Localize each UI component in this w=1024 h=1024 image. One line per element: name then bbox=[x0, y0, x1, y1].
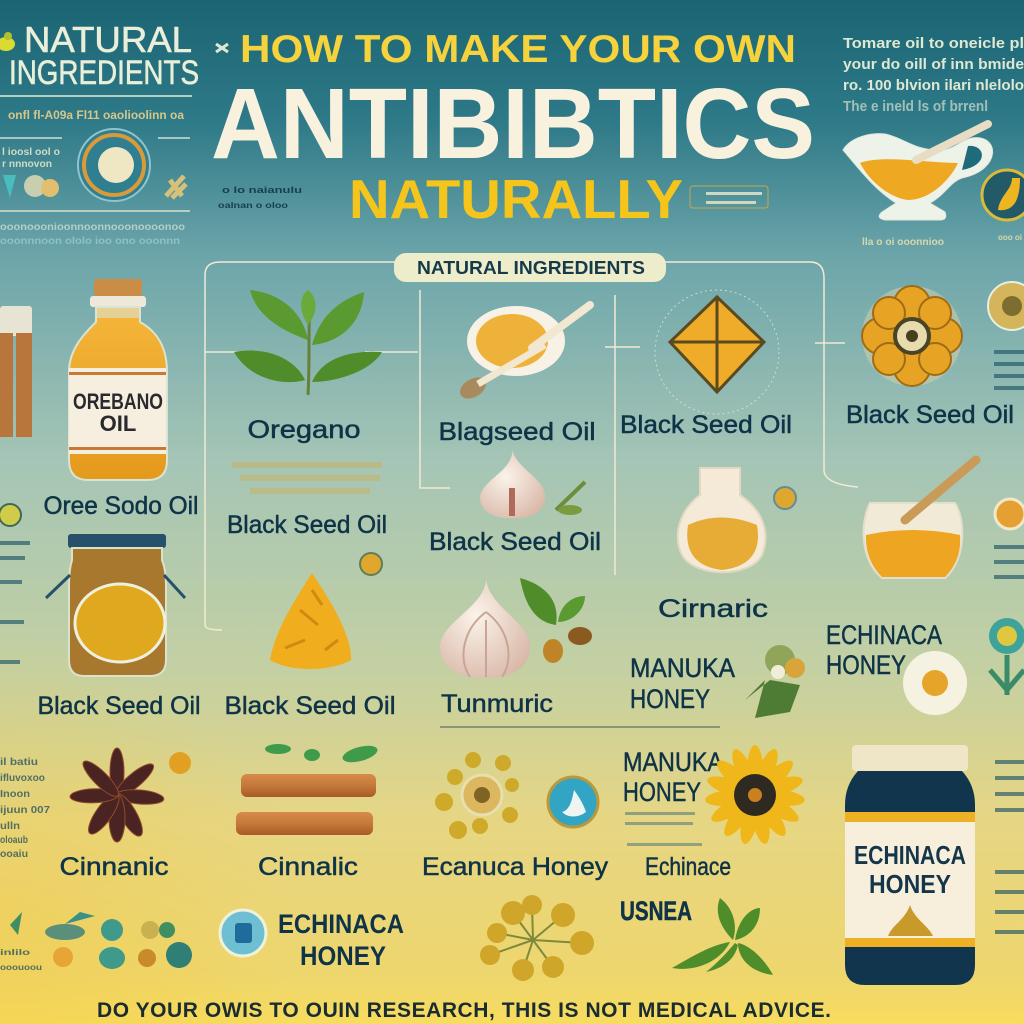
label: HONEY bbox=[300, 941, 386, 971]
icon: bowl and spoon bbox=[456, 305, 590, 403]
icons: bottom left herbs: ooouoou bbox=[0, 963, 42, 972]
text block: Tomare oil to oneicle pl bbox=[843, 35, 1024, 52]
icon: turmeric wedge bbox=[270, 573, 351, 669]
label: Echinace bbox=[645, 853, 731, 881]
label: MANUKA bbox=[623, 747, 723, 777]
heading: INGREDIENTS bbox=[9, 54, 199, 92]
small caption near title: oalnan o oloo bbox=[218, 201, 288, 210]
fine print: ooonnnoon ololo ioo ono ooonnn bbox=[0, 236, 180, 247]
icon: garlic small bbox=[480, 450, 585, 518]
icon: blue badge bbox=[220, 910, 266, 956]
title bbox=[211, 28, 815, 230]
label: Black Seed Oil bbox=[38, 692, 200, 720]
label: Oregano bbox=[248, 416, 360, 444]
label: HONEY bbox=[630, 684, 710, 714]
icon: umbel flower bbox=[480, 895, 594, 981]
left edge notes: ulln bbox=[0, 821, 20, 832]
fine print bbox=[0, 95, 192, 247]
icon: oregano oil bottle bbox=[69, 279, 167, 480]
small caption near title bbox=[218, 185, 768, 210]
icon: star anise bbox=[70, 748, 164, 842]
icon: daisy bbox=[903, 651, 967, 715]
left edge notes: oloaub bbox=[0, 835, 28, 846]
label: Black Seed Oil bbox=[429, 528, 601, 556]
title: ANTIBIBTICS bbox=[211, 68, 815, 180]
text block bbox=[843, 35, 1024, 115]
fine print: ooonooonioonnoonnooonoooonoo bbox=[0, 222, 185, 233]
caption bbox=[862, 233, 1022, 248]
icon: oregano oil bottle: OIL bbox=[100, 411, 136, 436]
icon: garlic large bbox=[440, 574, 592, 678]
fine print: onfl fl-A09a Fl11 oaolioolinn oa bbox=[8, 108, 184, 122]
label: MANUKA bbox=[630, 653, 735, 683]
icon: leaf bbox=[0, 32, 15, 51]
label bbox=[826, 620, 942, 680]
caption lines bbox=[625, 812, 702, 846]
divider caption bbox=[440, 726, 720, 728]
icon: round badge bbox=[78, 129, 150, 201]
icon: sunflower bbox=[704, 745, 806, 846]
panel: top left natural ingredients bbox=[0, 19, 199, 247]
small caption near title: o lo naianulu bbox=[222, 185, 302, 195]
icon: star flower emblem bbox=[655, 290, 779, 414]
caption: ooo oi bbox=[998, 233, 1022, 242]
icon: oregano leaves bbox=[234, 290, 382, 395]
blurred text bbox=[232, 462, 382, 494]
label: HONEY bbox=[826, 650, 906, 680]
label: Black Seed Oil bbox=[227, 511, 387, 539]
label: USNEA bbox=[620, 896, 692, 926]
text block: your do oill of inn bmide bbox=[843, 56, 1024, 73]
left edge notes: ifluvoxoo bbox=[0, 773, 45, 784]
label: Cinnanic bbox=[60, 853, 168, 881]
panel: top right sauce boat bbox=[843, 35, 1024, 248]
section label bbox=[394, 253, 666, 282]
fine print: r nnnovon bbox=[2, 159, 52, 170]
icon: oregano oil bottle: OREBANO bbox=[73, 389, 163, 414]
title: HOW TO MAKE YOUR OWN bbox=[240, 28, 796, 71]
left edge notes bbox=[0, 504, 50, 860]
icon: gravy boat bbox=[843, 124, 993, 220]
label: Black Seed Oil bbox=[620, 411, 792, 439]
fine print: l ioosl ool o bbox=[2, 147, 60, 158]
icon: green leaves bbox=[672, 898, 773, 975]
heading: NATURAL bbox=[24, 19, 192, 60]
label: HONEY bbox=[623, 777, 701, 807]
icon: honey jar: HONEY bbox=[869, 869, 951, 899]
icon: yellow wildflower bbox=[435, 752, 519, 839]
right edge decor bbox=[988, 282, 1024, 579]
flow connectors bbox=[205, 262, 858, 630]
icon: blue badge bbox=[548, 777, 598, 827]
icon: small coin bbox=[169, 752, 191, 774]
icon: round seal bbox=[982, 170, 1024, 220]
icon: small herbs bbox=[3, 175, 186, 198]
footer disclaimer: DO YOUR OWIS TO OUIN RESEARCH, THIS IS NOT MEDICAL ADVICE. bbox=[97, 999, 831, 1022]
heading bbox=[9, 19, 199, 92]
icon: honey jar: ECHINACA bbox=[854, 840, 966, 870]
label: ECHINACA bbox=[278, 909, 404, 939]
left edge cinnamon tubes bbox=[0, 306, 32, 437]
icon: herb sprig bbox=[745, 645, 805, 718]
icon: honey pot bbox=[864, 460, 976, 578]
title: NATURALLY bbox=[349, 168, 683, 230]
icon: small coin bbox=[360, 553, 382, 575]
left edge notes: ooaiu bbox=[0, 849, 28, 860]
text block: ro. 100 blvion ilari nlelolo bbox=[843, 77, 1024, 94]
label: Ecanuca Honey bbox=[422, 853, 609, 881]
icon: round flask bbox=[678, 468, 796, 572]
label: Black Seed Oil bbox=[846, 401, 1014, 429]
icon: cinnamon sticks bbox=[236, 743, 379, 835]
label: ECHINACA bbox=[826, 620, 942, 650]
label: Tunmuric bbox=[441, 690, 553, 718]
label bbox=[278, 909, 404, 971]
label bbox=[623, 747, 723, 807]
left edge notes: Inoon bbox=[0, 789, 30, 800]
left edge notes: ijuun 007 bbox=[0, 805, 50, 816]
label: Oree Sodo Oil bbox=[44, 492, 198, 520]
small tick icon bbox=[216, 44, 228, 52]
icon: jar of seeds bbox=[46, 534, 185, 676]
icons: bottom left herbs bbox=[0, 912, 192, 972]
label: Black Seed Oil bbox=[224, 692, 396, 720]
section label: NATURAL INGREDIENTS bbox=[417, 258, 645, 278]
label: Cinnalic bbox=[258, 853, 358, 881]
caption: lla o oi ooonnioo bbox=[862, 237, 944, 248]
label bbox=[630, 653, 735, 714]
right edge text lines bbox=[995, 760, 1024, 934]
label: Cirnaric bbox=[658, 595, 768, 623]
text block: The e ineld ls of brrenl bbox=[843, 98, 988, 115]
icon: honey jar bbox=[845, 745, 975, 985]
icon: flower top right bbox=[862, 286, 962, 386]
icon: small plant right bbox=[989, 618, 1024, 695]
icons: bottom left herbs: inlilo bbox=[0, 948, 30, 957]
left edge notes: il batiu bbox=[0, 757, 38, 768]
label: Blagseed Oil bbox=[438, 418, 596, 446]
